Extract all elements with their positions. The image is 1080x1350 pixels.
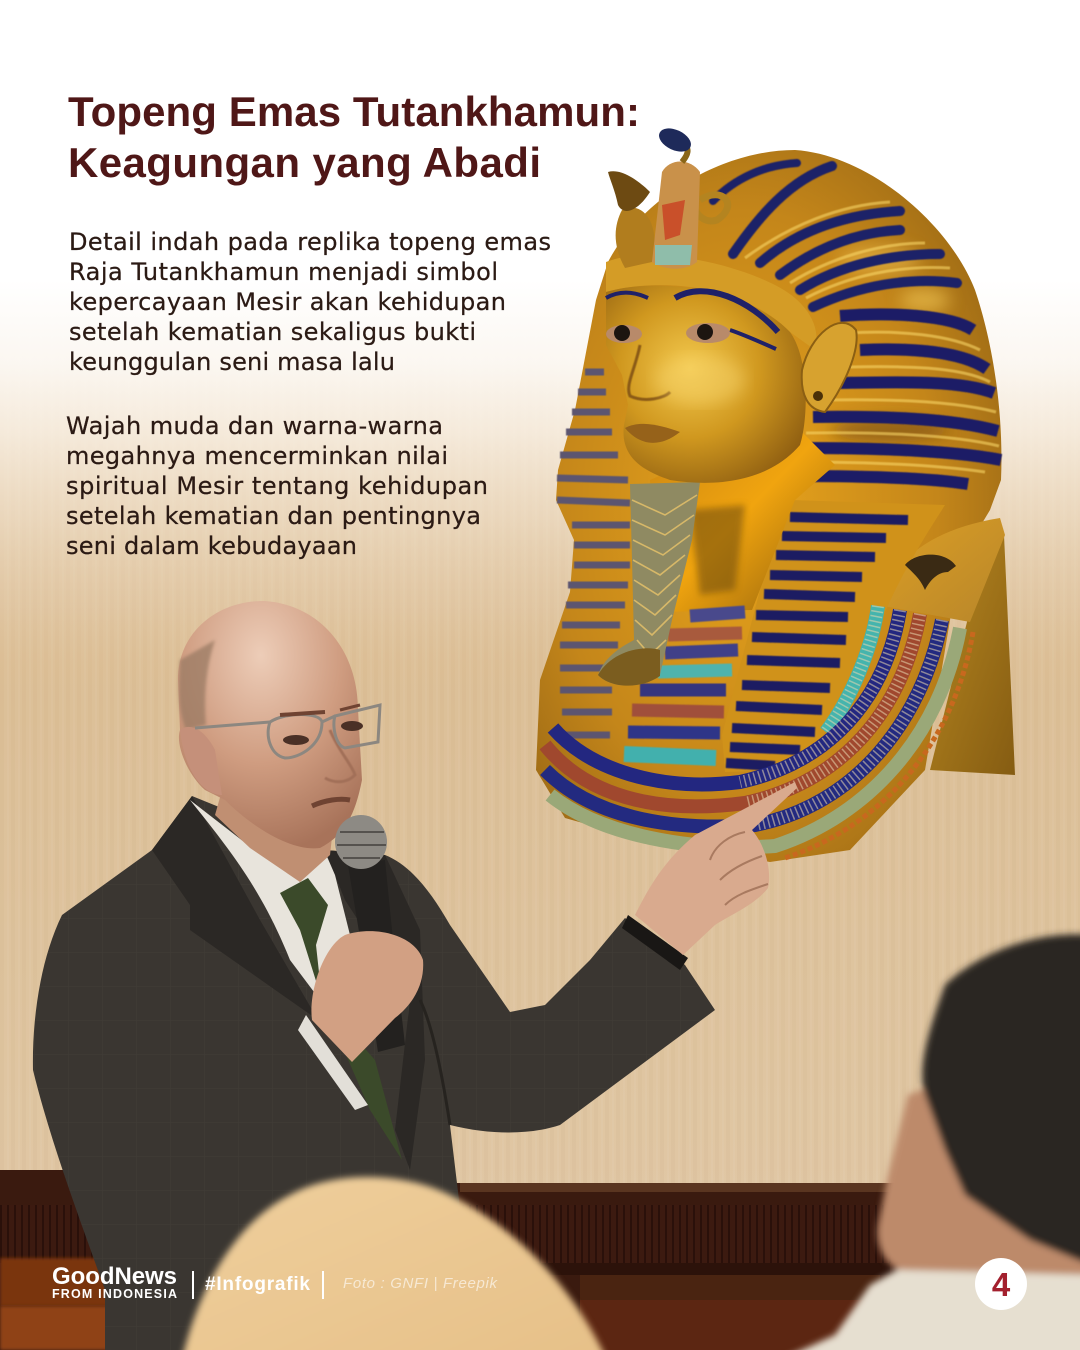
text block: second paragraph: setelah kematian dan pentingnya (66, 502, 481, 530)
speaker: microphone (335, 815, 405, 1052)
mask: falcon shoulder emblem (905, 555, 956, 590)
mask: shoulder plate (878, 518, 1005, 622)
footer: GoodNews from Indonesia logo: FROM INDONESIA (52, 1287, 177, 1301)
text block: intro paragraph: kepercayaan Mesir akan kehidupan (69, 288, 506, 316)
speaker: neck (215, 780, 335, 882)
speaker: pointing hand (635, 782, 797, 955)
speaker: head (178, 601, 362, 848)
text block: second paragraph: seni dalam kebudayaan (66, 532, 357, 560)
mask: facial features (606, 291, 778, 443)
speaker: cuff (298, 1015, 368, 1110)
mask: upper curved stripes (713, 163, 957, 307)
text block: second paragraph: Wajah muda dan warna-warna (66, 412, 443, 440)
background: wood panelling (0, 1170, 1080, 1350)
mask: face (606, 286, 806, 483)
text block: intro paragraph (69, 228, 551, 376)
mask: broad collar bands (545, 606, 973, 858)
text block: second paragraph (66, 412, 488, 560)
mask: ear (802, 323, 857, 412)
speaker: watch (622, 915, 688, 970)
speaker: glasses (195, 705, 380, 758)
title (68, 88, 640, 186)
speaker: lapel shading (152, 796, 425, 1170)
mask: neck (650, 420, 835, 612)
white shirt (780, 1262, 1080, 1350)
footer: photo credit: Foto : GNFI | Freepik (343, 1275, 498, 1292)
foreground: blurred man at right (780, 935, 1080, 1350)
title: Topeng Emas Tutankhamun: (68, 88, 640, 135)
speaker: tie (280, 878, 402, 1160)
mask: headband (606, 255, 817, 350)
mask: false beard (598, 482, 700, 686)
hair (922, 935, 1080, 1265)
speaker: side hair shade (179, 640, 215, 730)
mask: gold highlights between stripes (745, 202, 999, 472)
mask: inner collar bands (624, 612, 745, 758)
footer: GoodNews from Indonesia logo: GoodNews (52, 1263, 177, 1290)
speaker: shirt collar (190, 800, 350, 1000)
speaker: hand holding mic (311, 931, 423, 1062)
text block: intro paragraph: Raja Tutankhamun menjadi simbol (69, 258, 498, 286)
mask: left stripes (557, 372, 630, 735)
title: Keagungan yang Abadi (68, 139, 541, 186)
page number badge (975, 1258, 1027, 1310)
speaker: suit (33, 796, 715, 1350)
text block: second paragraph: spiritual Mesir tentang kehidupan (66, 472, 488, 500)
text block: intro paragraph: setelah kematian sekaligus bukti (69, 318, 476, 346)
footer: hashtag: #Infografik (205, 1274, 310, 1295)
golden mask of Tutankhamun (536, 124, 1015, 862)
foreground: blurred hijab (182, 1177, 607, 1350)
mask: right horizontal stripes (793, 314, 1001, 484)
speaker: mouth and brows (280, 705, 360, 806)
text block: second paragraph: megahnya mencerminkan nilai (66, 442, 448, 470)
mask: back flap (930, 535, 1015, 775)
mask: lower front lappet (722, 500, 945, 772)
neck and ear (877, 1085, 1080, 1275)
speaker: man in dark suit pointing at the mask (33, 601, 797, 1350)
text block: intro paragraph: Detail indah pada replika topeng emas (69, 228, 551, 256)
mask: metallic glints (770, 246, 950, 730)
text block: intro paragraph: keunggulan seni masa lalu (69, 348, 395, 376)
page number badge: 4 (992, 1266, 1011, 1303)
speaker: eyes and nose shading (283, 721, 363, 782)
mask: vulture and cobra crown (608, 124, 728, 269)
speaker: ear (180, 727, 222, 795)
mask: nemes headdress (536, 150, 1001, 862)
